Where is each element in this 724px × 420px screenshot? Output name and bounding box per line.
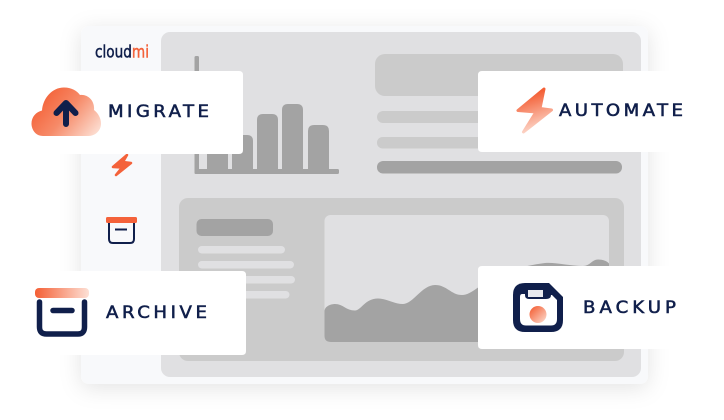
card: archive [20, 271, 246, 355]
sidebar icon: lightning bolt [113, 155, 131, 175]
card: backup [478, 266, 705, 349]
icon: cloud upload [32, 88, 101, 136]
card: automate [478, 71, 705, 152]
icon: archive box [35, 288, 89, 334]
area chart [324, 215, 609, 342]
logo: cloudm: cloudmi [95, 42, 149, 62]
panel heading placeholder [196, 219, 273, 236]
icon: floppy disk [513, 283, 563, 332]
card: migrate [20, 71, 243, 154]
label: BACKUP: BACKUP [583, 299, 676, 318]
label: AUTOMATE: AUTOMATE [559, 102, 683, 121]
dashboard window [81, 26, 648, 384]
sidebar icon: archive box [106, 217, 137, 243]
panel text lines [198, 246, 295, 298]
bar chart [194, 56, 339, 174]
label: MIGRATE: MIGRATE [108, 103, 209, 122]
main content area [161, 32, 641, 377]
top right summary block [375, 54, 623, 174]
bottom panel [179, 198, 624, 361]
icon: lightning bolt [518, 89, 552, 132]
label: ARCHIVE: ARCHIVE [106, 304, 207, 323]
